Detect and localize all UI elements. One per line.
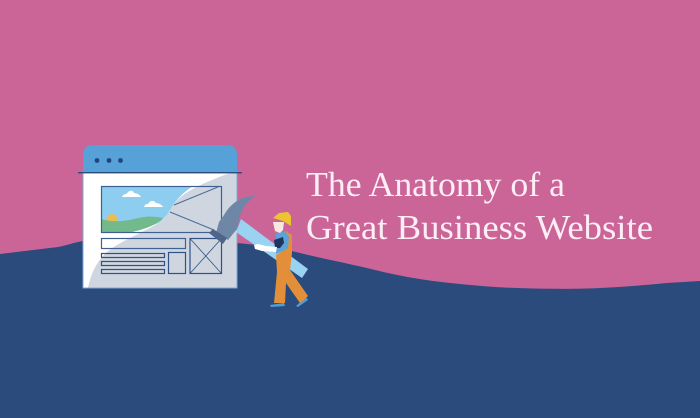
icon: browser window xyxy=(78,145,242,288)
hammer handle xyxy=(236,219,308,278)
dark sleeve xyxy=(274,237,284,248)
title line 2: Great Business Website xyxy=(306,208,653,247)
clouds xyxy=(122,191,141,197)
title bar rule xyxy=(78,172,242,173)
small square xyxy=(168,252,186,274)
face xyxy=(273,222,284,233)
text placeholder bar xyxy=(102,238,186,248)
helmet xyxy=(273,212,291,226)
icon: hammer xyxy=(209,196,308,278)
overalls and legs xyxy=(274,231,308,303)
back foot xyxy=(296,297,308,307)
title bar xyxy=(83,145,237,172)
hammer face xyxy=(209,229,227,244)
crack lines xyxy=(170,187,218,230)
arm and hand xyxy=(254,244,277,252)
window dots xyxy=(95,158,123,163)
title xyxy=(306,165,653,247)
torso shirt xyxy=(276,231,290,254)
title line 1: The Anatomy of a xyxy=(306,165,565,204)
icon: construction worker xyxy=(254,212,308,307)
sky xyxy=(101,186,193,232)
window page body xyxy=(83,172,237,288)
hero image frame xyxy=(101,186,222,232)
torn grey page overlay xyxy=(88,172,237,288)
sun xyxy=(106,214,118,225)
page outline xyxy=(83,172,237,288)
navy wave ground xyxy=(0,238,700,418)
hammer head and claw xyxy=(216,196,256,240)
frame outline xyxy=(102,186,222,232)
front foot xyxy=(270,303,285,307)
text lines xyxy=(102,254,164,274)
image placeholder xyxy=(190,238,222,274)
green hill xyxy=(101,217,163,232)
